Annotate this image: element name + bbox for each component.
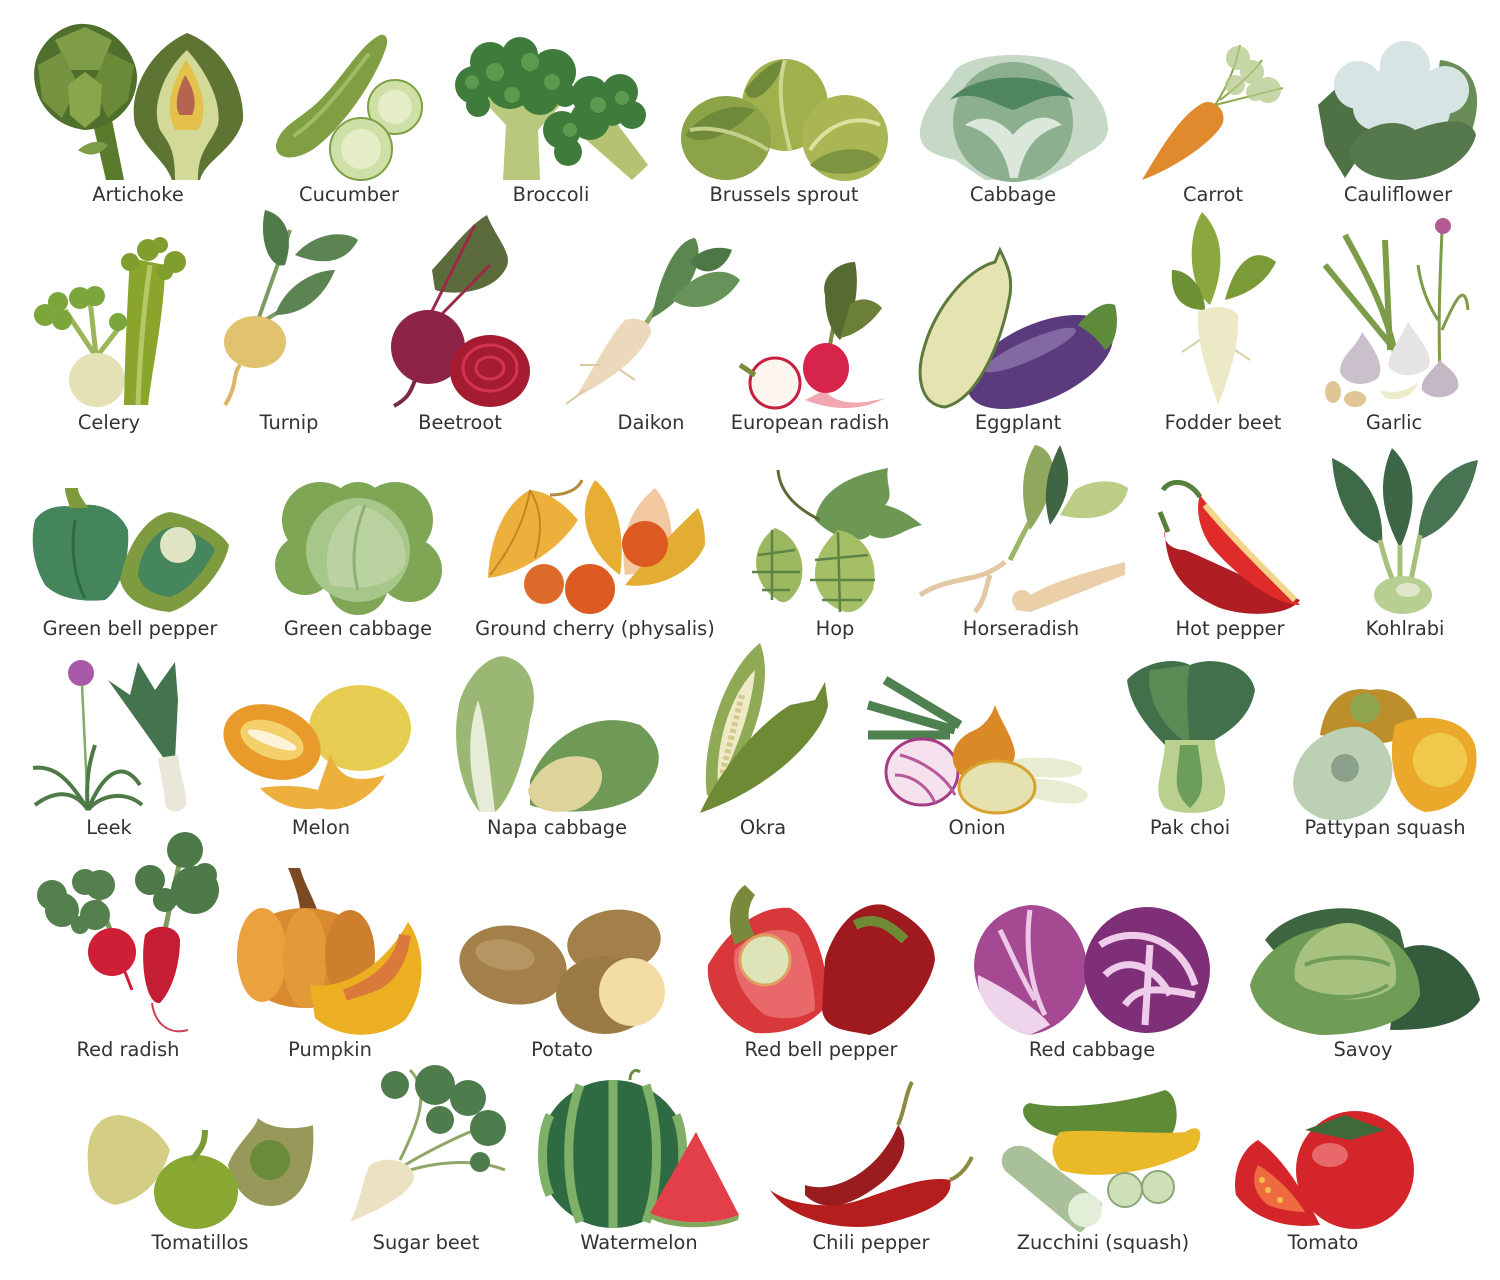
item: garlic xyxy=(1325,218,1468,434)
item: cabbage xyxy=(920,55,1108,206)
label: Watermelon: Watermelon xyxy=(580,1231,698,1254)
item: red radish xyxy=(37,832,219,1061)
label: Cabbage: Cabbage xyxy=(970,183,1056,206)
label: Red radish: Red radish xyxy=(77,1038,179,1061)
item: onion xyxy=(868,680,1088,839)
item: broccoli xyxy=(455,37,648,206)
item: tomatillos xyxy=(88,1115,313,1254)
item: kohlrabi xyxy=(1332,448,1478,640)
label: Savoy: Savoy xyxy=(1333,1038,1393,1061)
item: red cabbage xyxy=(974,905,1210,1061)
item: ground cherry xyxy=(475,480,715,640)
label: Red cabbage: Red cabbage xyxy=(1029,1038,1155,1061)
item: pattypan squash xyxy=(1293,689,1477,839)
label: Beetroot: Beetroot xyxy=(418,411,502,434)
label: Pattypan squash: Pattypan squash xyxy=(1304,816,1466,839)
hop cones xyxy=(752,528,875,612)
item: watermelon xyxy=(539,1070,739,1254)
label: Brussels sprout: Brussels sprout xyxy=(709,183,859,206)
label: Pak choi: Pak choi xyxy=(1150,816,1230,839)
item: turnip xyxy=(224,210,358,434)
label: Celery: Celery xyxy=(78,411,140,434)
label: Red bell pepper: Red bell pepper xyxy=(745,1038,897,1061)
item: okra xyxy=(700,643,828,839)
item: cauliflower xyxy=(1318,41,1477,206)
label: Leek: Leek xyxy=(86,816,133,839)
item: pak choi xyxy=(1127,661,1255,839)
item: hot pepper xyxy=(1160,482,1300,640)
label: Chili pepper: Chili pepper xyxy=(813,1231,929,1254)
label: Eggplant: Eggplant xyxy=(975,411,1062,434)
label: Green cabbage: Green cabbage xyxy=(284,617,432,640)
item: horseradish xyxy=(920,445,1128,640)
label: Onion: Onion xyxy=(948,816,1006,839)
label: Daikon: Daikon xyxy=(618,411,684,434)
label: Turnip: Turnip xyxy=(259,411,318,434)
item: beetroot xyxy=(391,215,530,434)
label: Artichoke: Artichoke xyxy=(92,183,184,206)
item: green cabbage xyxy=(275,482,442,640)
item: green bell pepper xyxy=(33,488,229,640)
item: eggplant xyxy=(920,250,1127,434)
item: tomato xyxy=(1235,1111,1414,1254)
item: red bell pepper xyxy=(708,885,935,1061)
label: Green bell pepper: Green bell pepper xyxy=(43,617,217,640)
label: Cucumber: Cucumber xyxy=(299,183,399,206)
label: Sugar beet: Sugar beet xyxy=(373,1231,480,1254)
label: Potato: Potato xyxy=(531,1038,593,1061)
label: Garlic: Garlic xyxy=(1366,411,1422,434)
label: Pumpkin: Pumpkin xyxy=(288,1038,372,1061)
label: Horseradish: Horseradish xyxy=(963,617,1079,640)
label: Hop: Hop xyxy=(816,617,854,640)
label: Cauliflower: Cauliflower xyxy=(1344,183,1452,206)
label: Okra: Okra xyxy=(740,816,786,839)
label: European radish: European radish xyxy=(731,411,889,434)
item: cucumber xyxy=(276,35,422,206)
label: Ground cherry (physalis): Ground cherry (physalis) xyxy=(475,617,715,640)
item: celery xyxy=(34,237,186,434)
item: carrot xyxy=(1142,45,1283,206)
item: potato xyxy=(453,904,665,1061)
label: Fodder beet: Fodder beet xyxy=(1165,411,1282,434)
label: Melon: Melon xyxy=(292,816,350,839)
item: brussels sprout xyxy=(681,59,888,206)
label: Kohlrabi: Kohlrabi xyxy=(1366,617,1444,640)
label: Zucchini (squash): Zucchini (squash) xyxy=(1017,1231,1189,1254)
label: Broccoli: Broccoli xyxy=(513,183,589,206)
item: daikon xyxy=(566,238,740,434)
item: fodder beet xyxy=(1165,212,1282,434)
label: Tomato: Tomato xyxy=(1287,1231,1358,1254)
item: zucchini xyxy=(1006,1090,1200,1254)
item: napa cabbage xyxy=(456,656,659,839)
item: leek xyxy=(33,660,186,839)
label: Hot pepper: Hot pepper xyxy=(1176,617,1285,640)
item: melon xyxy=(213,685,411,839)
item: savoy xyxy=(1250,908,1480,1061)
item: pumpkin xyxy=(237,868,422,1061)
label: Tomatillos: Tomatillos xyxy=(151,1231,248,1254)
item: sugar beet xyxy=(350,1065,506,1254)
label: Carrot: Carrot xyxy=(1183,183,1243,206)
label: Napa cabbage: Napa cabbage xyxy=(487,816,627,839)
item: hop xyxy=(752,468,922,640)
item: artichoke xyxy=(34,24,243,206)
item: european radish xyxy=(731,262,889,434)
item: chili pepper xyxy=(770,1082,972,1254)
